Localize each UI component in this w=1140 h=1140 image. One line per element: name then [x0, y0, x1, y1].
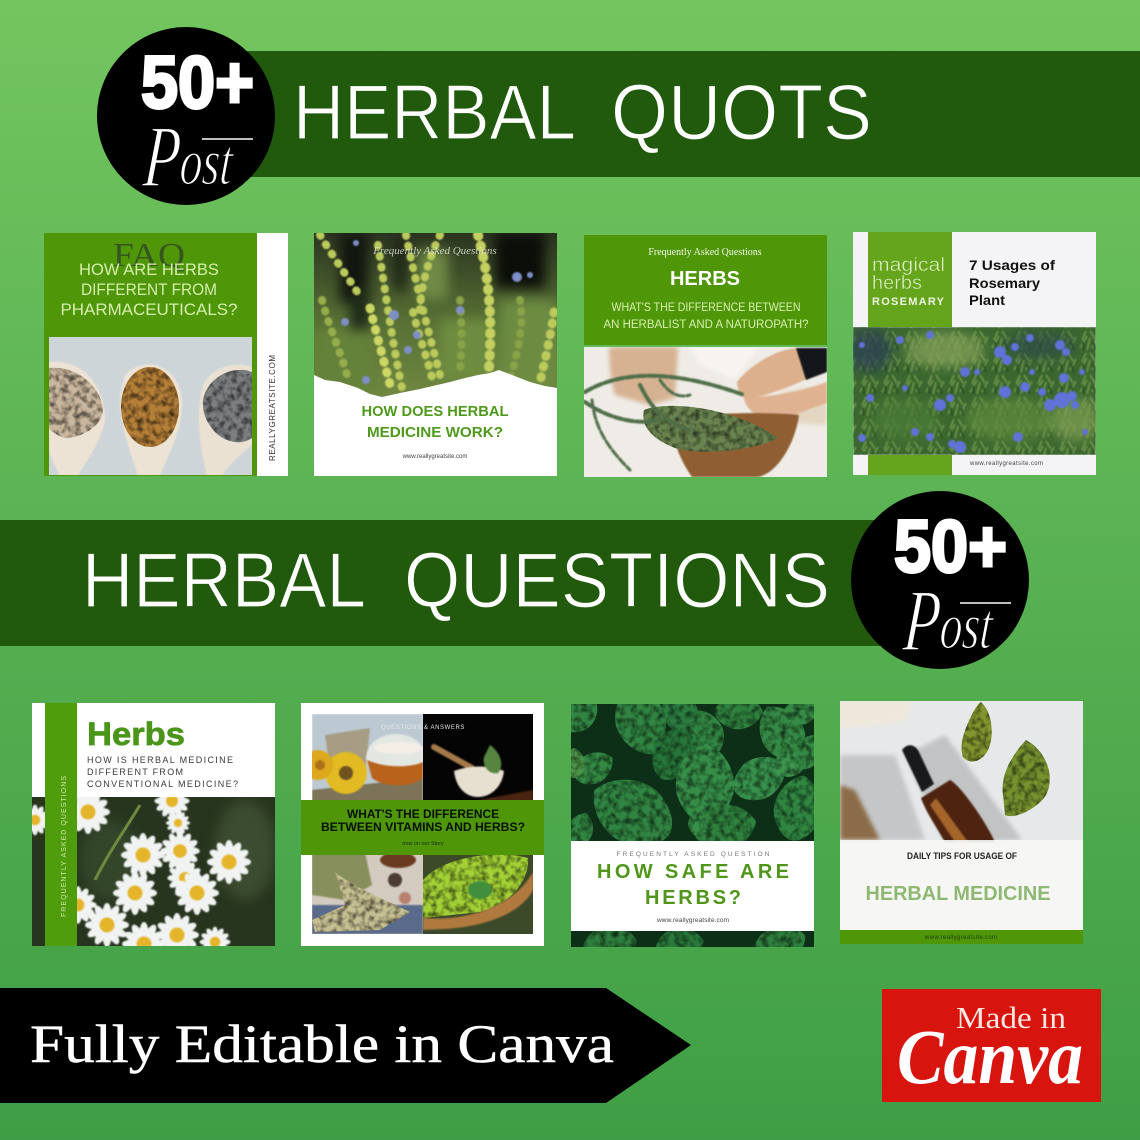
torn white panel [314, 370, 557, 476]
heading: 7 usages: Plant [969, 292, 1005, 308]
photo: mint leaves [571, 704, 814, 947]
heading: herbs: HERBS [670, 268, 740, 290]
label: frequently asked questions: Frequently Asked Questions [372, 245, 497, 257]
caption: now on our Story [402, 841, 444, 847]
card: herbalist vs naturopath [584, 235, 827, 477]
question text: HERBS? [645, 887, 741, 909]
question text [597, 861, 789, 909]
green footer: www.reallygreatsite.com [924, 935, 997, 941]
website: www.reallygreatsite.com [656, 917, 729, 924]
banner: herbal questions [0, 520, 880, 646]
question text: HOW SAFE ARE [597, 861, 789, 883]
card: how are herbs different [44, 233, 288, 476]
label: FREQUENTLY ASKED QUESTION [616, 851, 770, 858]
vertical url: REALLYGREATSITE.COM [268, 355, 277, 461]
badge: 50+ post top [97, 27, 275, 206]
question text: HOW DOES HERBAL [362, 404, 509, 420]
heading: herbal questions: HERBAL [82, 536, 366, 624]
translucent panel [840, 840, 1083, 930]
badge: 50+ post middle [851, 491, 1029, 670]
badge: 50+ post top: P [140, 109, 184, 206]
photo: dried leaves [312, 852, 423, 934]
photo: daisies [32, 797, 275, 946]
label: magical herbs rosemary: ROSEMARY [872, 296, 945, 308]
white panel [571, 841, 814, 931]
heading: 7 usages: Rosemary [969, 275, 1040, 291]
photo: three spoons [49, 337, 252, 476]
question text: DIFFERENT FROM [81, 280, 217, 299]
heading: herbal questions [82, 536, 830, 624]
card: how does herbal medicine work [314, 233, 557, 476]
website: www.reallygreatsite.com [969, 461, 1043, 467]
label: FAQ: FAQ [113, 237, 185, 274]
photo: green sprigs [314, 233, 557, 476]
heading: herbal quots: QUOTS [611, 68, 872, 156]
badge: 50+ post top: ost [178, 127, 236, 199]
heading: HERBAL MEDICINE [866, 883, 1050, 905]
question text [60, 260, 238, 319]
text: fully editable in canva: Fully Editable in Canva [30, 1014, 614, 1074]
label: DAILY TIPS FOR USAGE OF [907, 851, 1017, 861]
photo: tea and sunflower [312, 714, 423, 800]
badge: made in canva: Made in [956, 1000, 1067, 1035]
green footer [840, 930, 1083, 944]
question text [321, 809, 525, 834]
badge: 50+ post middle: P [900, 573, 944, 670]
heading: herbs: Herbs [87, 716, 185, 752]
arrow banner: fully editable [0, 988, 691, 1103]
card: herbs conventional medicine [32, 703, 275, 946]
badge: 50+ post middle: ost [938, 591, 996, 663]
photo: green basket [423, 852, 533, 934]
question text [87, 755, 238, 789]
label: magical herbs rosemary: herbs [872, 272, 922, 294]
heading: 7 usages [969, 257, 1055, 308]
question text: AN HERBALIST AND A NATUROPATH? [604, 319, 808, 331]
vertical label: FREQUENTLY ASKED QUESTIONS [61, 776, 68, 917]
question text: PHARMACEUTICALS? [60, 300, 238, 319]
question text: WHAT'S THE DIFFERENCE BETWEEN [612, 302, 800, 314]
label: frequently asked questions: Frequently Asked Questions [648, 247, 762, 258]
question text [604, 302, 808, 331]
label: questions and answers: QUESTIONS & ANSWERS [381, 725, 465, 731]
card: herbal medicine daily tips [840, 701, 1083, 944]
badge: 50+ post top: 50+ [141, 41, 254, 124]
question text: MEDICINE WORK? [367, 425, 503, 441]
green band [301, 800, 544, 855]
heading: herbal quots: HERBAL [293, 68, 576, 156]
badge: 50+ post middle: 50+ [894, 505, 1007, 588]
heading: herbal quots [293, 68, 872, 156]
badge: made in canva: Canva [897, 1013, 1083, 1100]
photo: dropper bottle [840, 701, 1083, 944]
heading: 7 usages: 7 Usages of [969, 257, 1055, 273]
question text: HOW ARE HERBS [79, 260, 219, 279]
photo: hands and basket [584, 347, 827, 477]
heading: herbal questions: QUESTIONS [404, 536, 830, 624]
footer green block [868, 455, 952, 475]
card: how safe are herbs [571, 704, 814, 947]
green vertical strip [45, 703, 77, 946]
photo: rosemary [848, 327, 1100, 455]
card: vitamins and herbs [301, 703, 544, 946]
question text: CONVENTIONAL MEDICINE? [87, 779, 238, 789]
banner: herbal quots [240, 51, 1140, 177]
photo: mortar and pestle [423, 714, 533, 802]
question text: BETWEEN VITAMINS AND HERBS? [321, 822, 525, 834]
question text: HOW IS HERBAL MEDICINE [87, 755, 233, 765]
label: magical herbs rosemary [872, 254, 945, 308]
question text: DIFFERENT FROM [87, 767, 183, 777]
card: rosemary [848, 232, 1100, 475]
website: www.reallygreatsite.com [402, 454, 467, 460]
question text [362, 404, 509, 441]
label: magical herbs rosemary: magical [872, 254, 945, 276]
question text: WHAT'S THE DIFFERENCE [347, 809, 499, 821]
